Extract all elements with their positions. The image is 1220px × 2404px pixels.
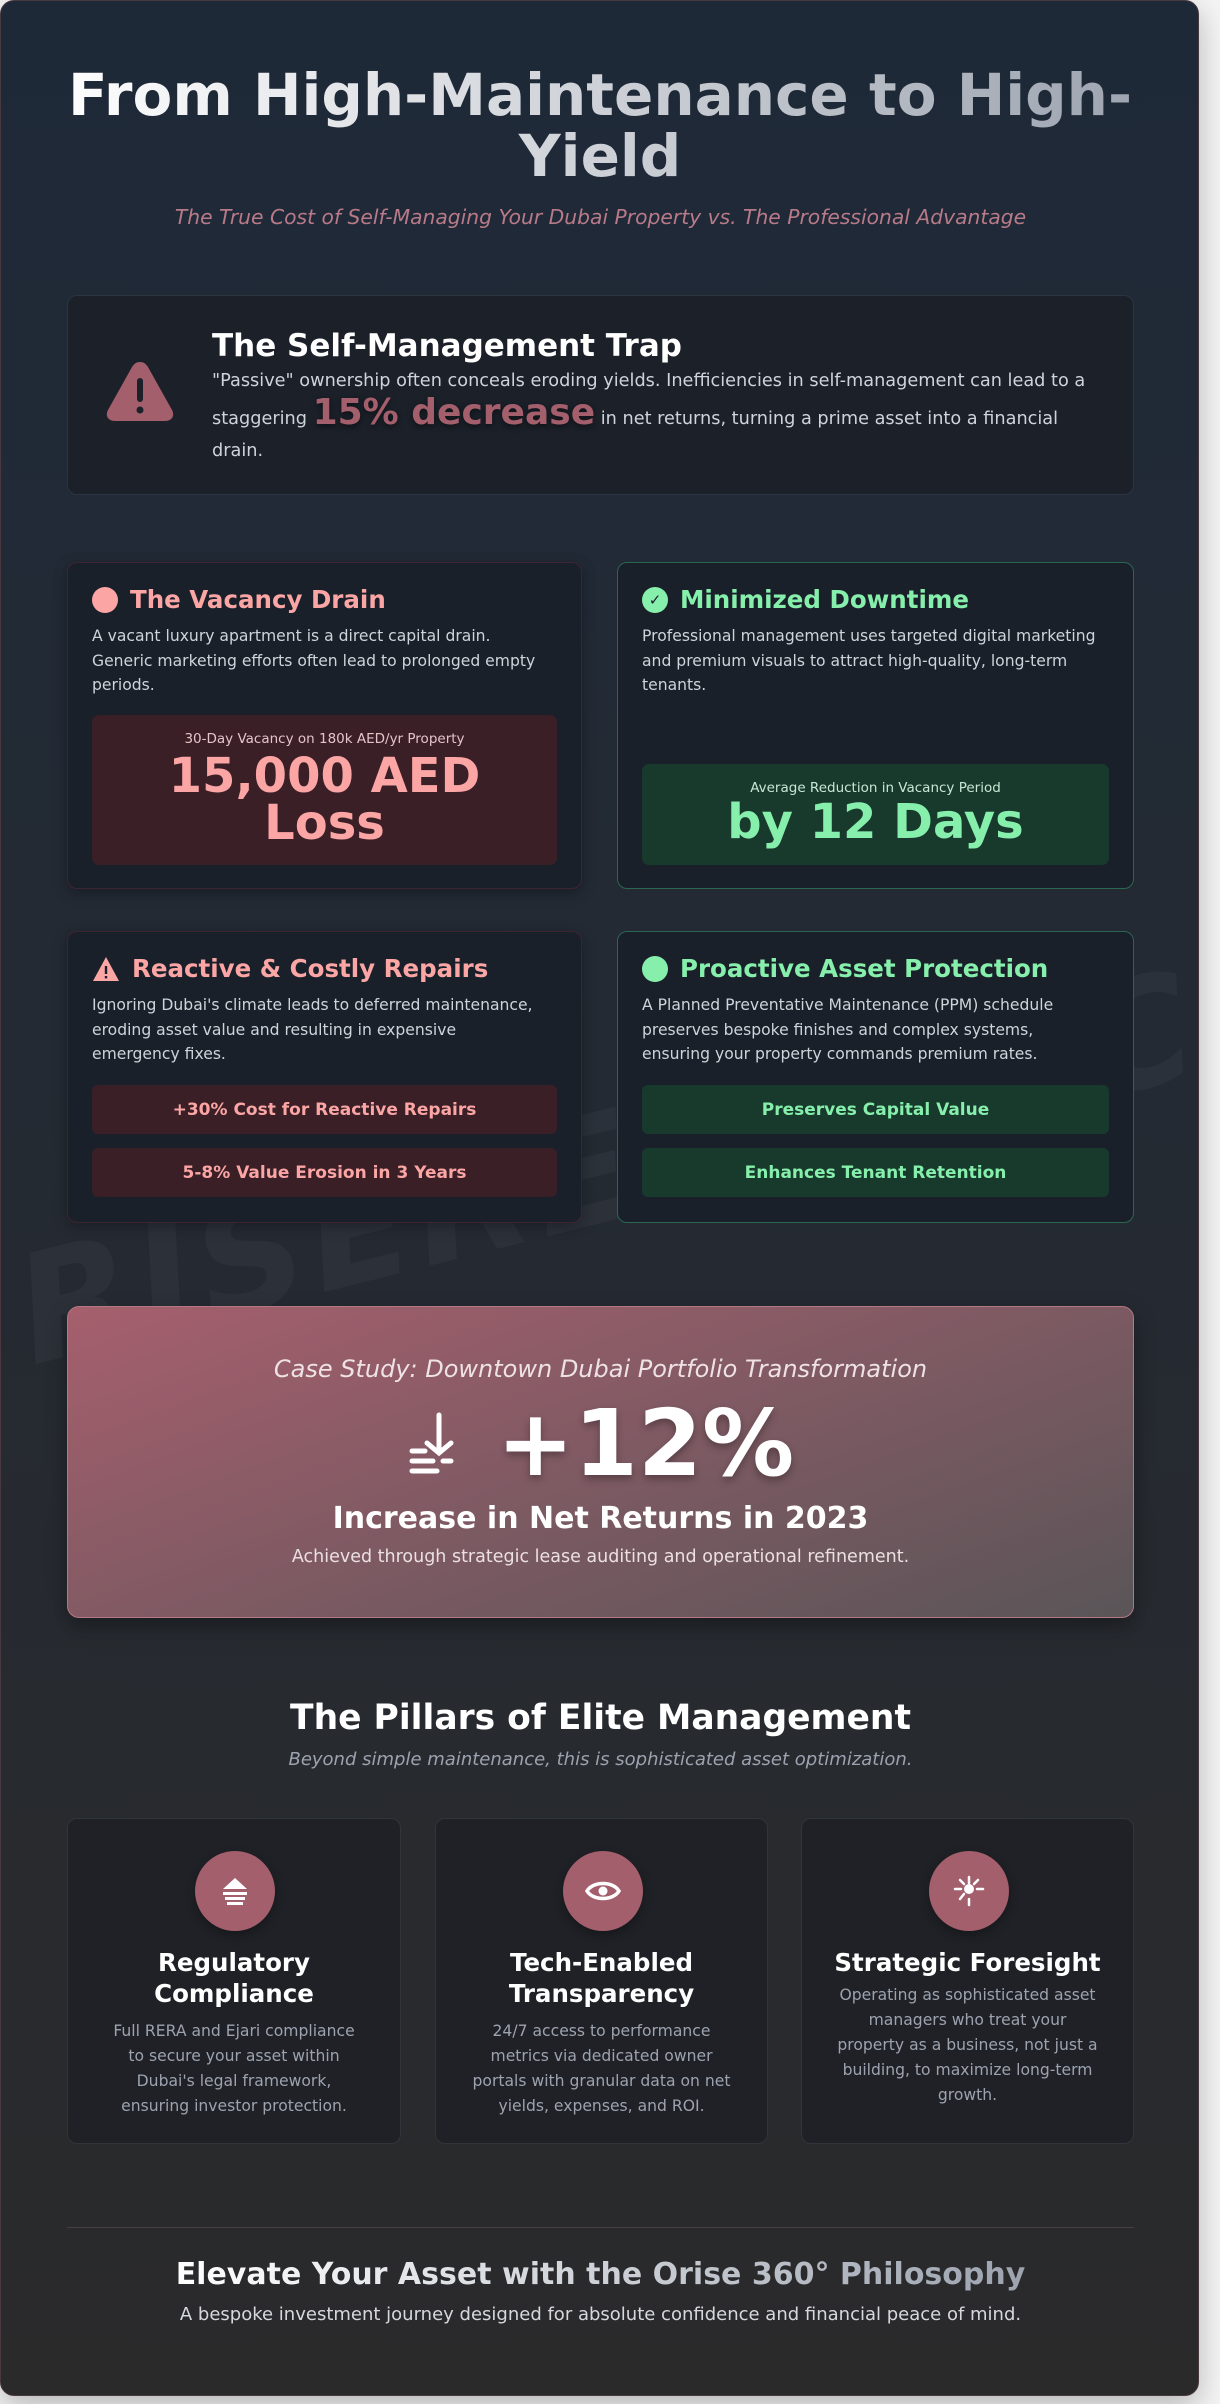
- icon: [195, 1851, 275, 1931]
- panel: case study: [67, 1306, 1134, 1618]
- heading with icon: Proactive Asset Protection: [680, 954, 1048, 983]
- subtitle: The True Cost of Self-Managing Your Dubai Property vs. The Professional Advantage: [175, 205, 1026, 229]
- text: Operating as sophisticated asset managers who treat your: [839, 1986, 1096, 2029]
- heading with icon: The Vacancy Drain: [130, 585, 386, 614]
- footer heading: Elevate Your Asset with the Orise 360° Philosophy: [176, 2257, 1025, 2292]
- footer subtext: A bespoke investment journey designed for absolute confidence and financial peace of mind.: [180, 2304, 1021, 2325]
- heading with check icon: Minimized Downtime: [680, 585, 969, 614]
- pillars heading: The Pillars of Elite Management: [290, 1698, 911, 1738]
- pillar: strategic foresight: [801, 1818, 1134, 2144]
- title: Compliance: [154, 1979, 314, 2008]
- body: Ignoring Dubai's climate leads to deferred maintenance, eroding asset value and resulting in expensive emergency fixes.: [92, 996, 533, 1063]
- text: [837, 1986, 1098, 2104]
- pillars subheading: Beyond simple maintenance, this is sophisticated asset optimization.: [288, 1749, 913, 1770]
- pillar: tech transparency: [435, 1818, 768, 2144]
- body: A Planned Preventative Maintenance (PPM) schedule preserves bespoke finishes and complex systems, ensuring your property commands premium rates.: [642, 996, 1053, 1063]
- pillar: regulatory compliance: [67, 1818, 401, 2144]
- title: Strategic Foresight: [834, 1948, 1101, 1977]
- title: Regulatory: [158, 1948, 310, 1977]
- stat box: by 12 Days: [727, 794, 1024, 850]
- bar 2: Enhances Tenant Retention: [745, 1162, 1006, 1182]
- body: A vacant luxury apartment is a direct capital drain. Generic marketing efforts often lead to prolonged empty periods.: [92, 627, 535, 694]
- stat bar 2: 5-8% Value Erosion in 3 Years: [183, 1162, 466, 1182]
- title: Transparency: [509, 1979, 694, 2008]
- trap body text: "Passive" ownership often conceals eroding yields. Inefficiencies in self-management can lead to a: [212, 371, 1085, 391]
- trap body text: [212, 371, 1085, 461]
- stat sub caption: Achieved through strategic lease auditing and operational refinement.: [292, 1547, 909, 1567]
- stat bar 1: [92, 1085, 557, 1134]
- heading with check icon: ✓: [649, 590, 661, 608]
- icon: warning: [106, 362, 174, 421]
- panel: minimized downtime: [617, 562, 1134, 889]
- title: [509, 1948, 694, 2008]
- title: From High-Maintenance to High-Yield: [68, 61, 1132, 190]
- big stat with icon: +12%: [497, 1390, 794, 1497]
- panel: vacancy drain: [67, 562, 582, 889]
- stat box: [642, 764, 1109, 865]
- trap heading: The Self-Management Trap: [212, 328, 682, 364]
- trap body text: drain.: [212, 441, 263, 461]
- icon: arrow down lines: [410, 1412, 454, 1474]
- stat box: 15,000 AED: [169, 748, 480, 804]
- case study label: Case Study: Downtown Dubai Portfolio Transformation: [274, 1355, 927, 1383]
- text: 24/7 access to performance metrics via dedicated owner portals with granular data on net yields, expenses, and ROI.: [473, 2022, 730, 2115]
- stat bar 1: +30% Cost for Reactive Repairs: [173, 1100, 476, 1120]
- stat caption: Increase in Net Returns in 2023: [333, 1501, 868, 1536]
- text: property as a business, not just a building, to maximize long-term growth.: [837, 2036, 1098, 2104]
- stat box: [92, 715, 557, 865]
- icon: [929, 1851, 1009, 1931]
- stat box: Loss: [264, 795, 385, 851]
- icon: [563, 1851, 643, 1931]
- stat box: 30-Day Vacancy on 180k AED/yr Property: [184, 731, 465, 747]
- stat bar 2: [92, 1148, 557, 1197]
- heading with warning icon: Reactive & Costly Repairs: [132, 954, 488, 983]
- title: Tech-Enabled: [510, 1948, 693, 1977]
- title: [154, 1948, 314, 2008]
- bar 2: [642, 1148, 1109, 1197]
- stat box: Average Reduction in Vacancy Period: [750, 780, 1001, 796]
- panel: reactive repairs: [67, 931, 582, 1223]
- text: Full RERA and Ejari compliance to secure your asset within Dubai's legal framework, ensuring investor protection.: [113, 2022, 355, 2115]
- bar 1: Preserves Capital Value: [762, 1100, 989, 1120]
- trap body text: staggering 15% decrease in net returns, turning a prime asset into a financial: [212, 392, 1058, 433]
- panel: self-management trap: [67, 295, 1134, 495]
- body: Professional management uses targeted digital marketing and premium visuals to attract high-quality, long-term tenants.: [642, 627, 1096, 694]
- bar 1: [642, 1085, 1109, 1134]
- panel: proactive protection: [617, 931, 1134, 1223]
